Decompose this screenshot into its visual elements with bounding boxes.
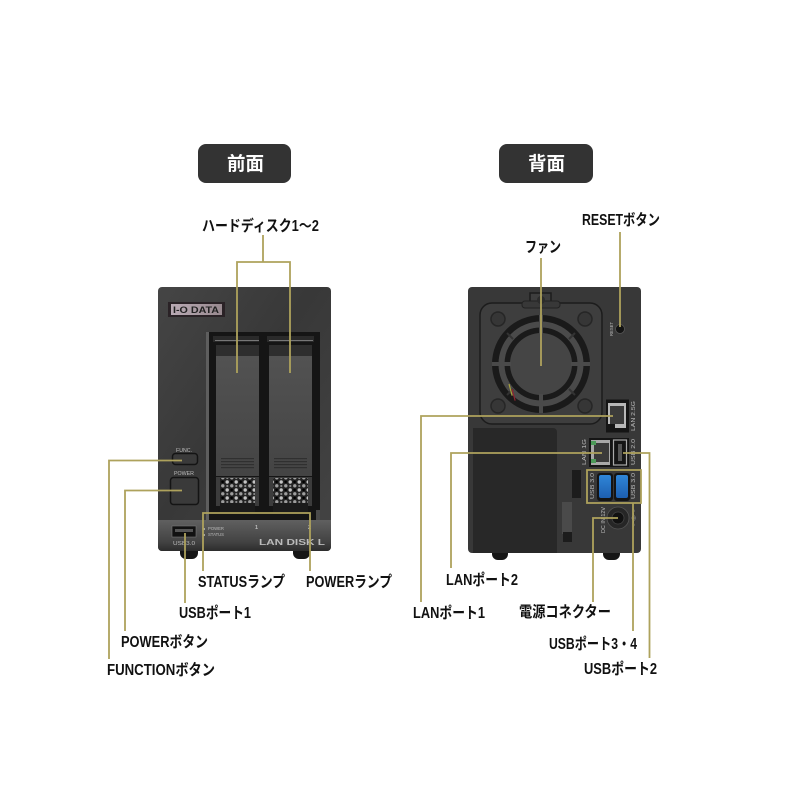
lan port 2: LAN 1G (582, 439, 588, 465)
label: fan: ファン (525, 239, 561, 256)
usb ports 3 and 4 (590, 473, 637, 501)
heading: front (198, 144, 291, 183)
fan screws (491, 312, 592, 413)
front device (158, 287, 331, 559)
label: usb port 2: USBポート2 (584, 660, 657, 678)
fan (492, 315, 590, 413)
func button (172, 448, 198, 464)
lan port 1: LAN 2.5G (631, 401, 637, 431)
label: status lamp: STATUSランプ (198, 573, 285, 591)
usb port 2: USB 2.0 (631, 439, 637, 465)
reset button: RESET (609, 322, 614, 336)
heading: back: 背面 (528, 149, 565, 176)
func button: FUNC. (176, 448, 192, 454)
bottom strip (158, 520, 331, 551)
label: power lamp: POWERランプ (306, 573, 392, 591)
lan port 2 (582, 438, 612, 467)
bottom strip: 1 (255, 525, 258, 531)
reset button (609, 322, 624, 336)
usb ports 3 and 4: USB 3.0 (590, 473, 596, 499)
bottom strip: STATUS (208, 532, 224, 537)
lan port 1 (606, 400, 637, 432)
foot right (293, 545, 310, 559)
label: function button: FUNCTIONボタン (107, 661, 215, 679)
logo (168, 302, 225, 317)
logo: I-O DATA (173, 305, 220, 315)
black label panel (473, 428, 557, 553)
drive bay (206, 332, 320, 520)
body (158, 287, 331, 551)
label: power connector: 電源コネクター (519, 603, 611, 621)
leader lines: back (421, 232, 650, 658)
usb port 2 (612, 438, 637, 467)
label: usb ports 3 and 4: USBポート3・4 (549, 635, 637, 653)
power connector (601, 506, 637, 533)
foot left (180, 545, 198, 559)
power connector: DC IN 12V (601, 506, 607, 533)
label: lan port 1: LANポート1 (413, 604, 485, 622)
power button: POWER (174, 471, 194, 477)
fan frame (480, 293, 602, 424)
leader lines: front (109, 235, 310, 659)
bottom strip: 2 (308, 525, 311, 531)
heading: front: 前面 (227, 149, 264, 176)
power button (170, 471, 198, 504)
foot left (492, 547, 508, 560)
bottom strip: POWER (208, 526, 225, 531)
label: lan port 2: LANポート2 (446, 571, 518, 589)
bottom strip: LAN DISK L (259, 538, 325, 547)
foot right (603, 547, 620, 560)
tabs (562, 470, 581, 542)
label: power button: POWERボタン (121, 633, 208, 651)
label: hard disks: ハードディスク1〜2 (202, 216, 319, 235)
label: reset button: RESETボタン (582, 211, 660, 229)
tray 1 (213, 336, 259, 512)
tray 2 (267, 336, 314, 512)
usb ports 3 and 4: USB 3.0 (631, 473, 637, 499)
power connector: ○-◎-○ (631, 509, 637, 527)
bottom strip: USB3.0 (173, 541, 195, 547)
heading: back (499, 144, 593, 183)
body (468, 287, 641, 553)
back device (468, 287, 641, 560)
label: usb port 1: USBポート1 (179, 604, 251, 622)
